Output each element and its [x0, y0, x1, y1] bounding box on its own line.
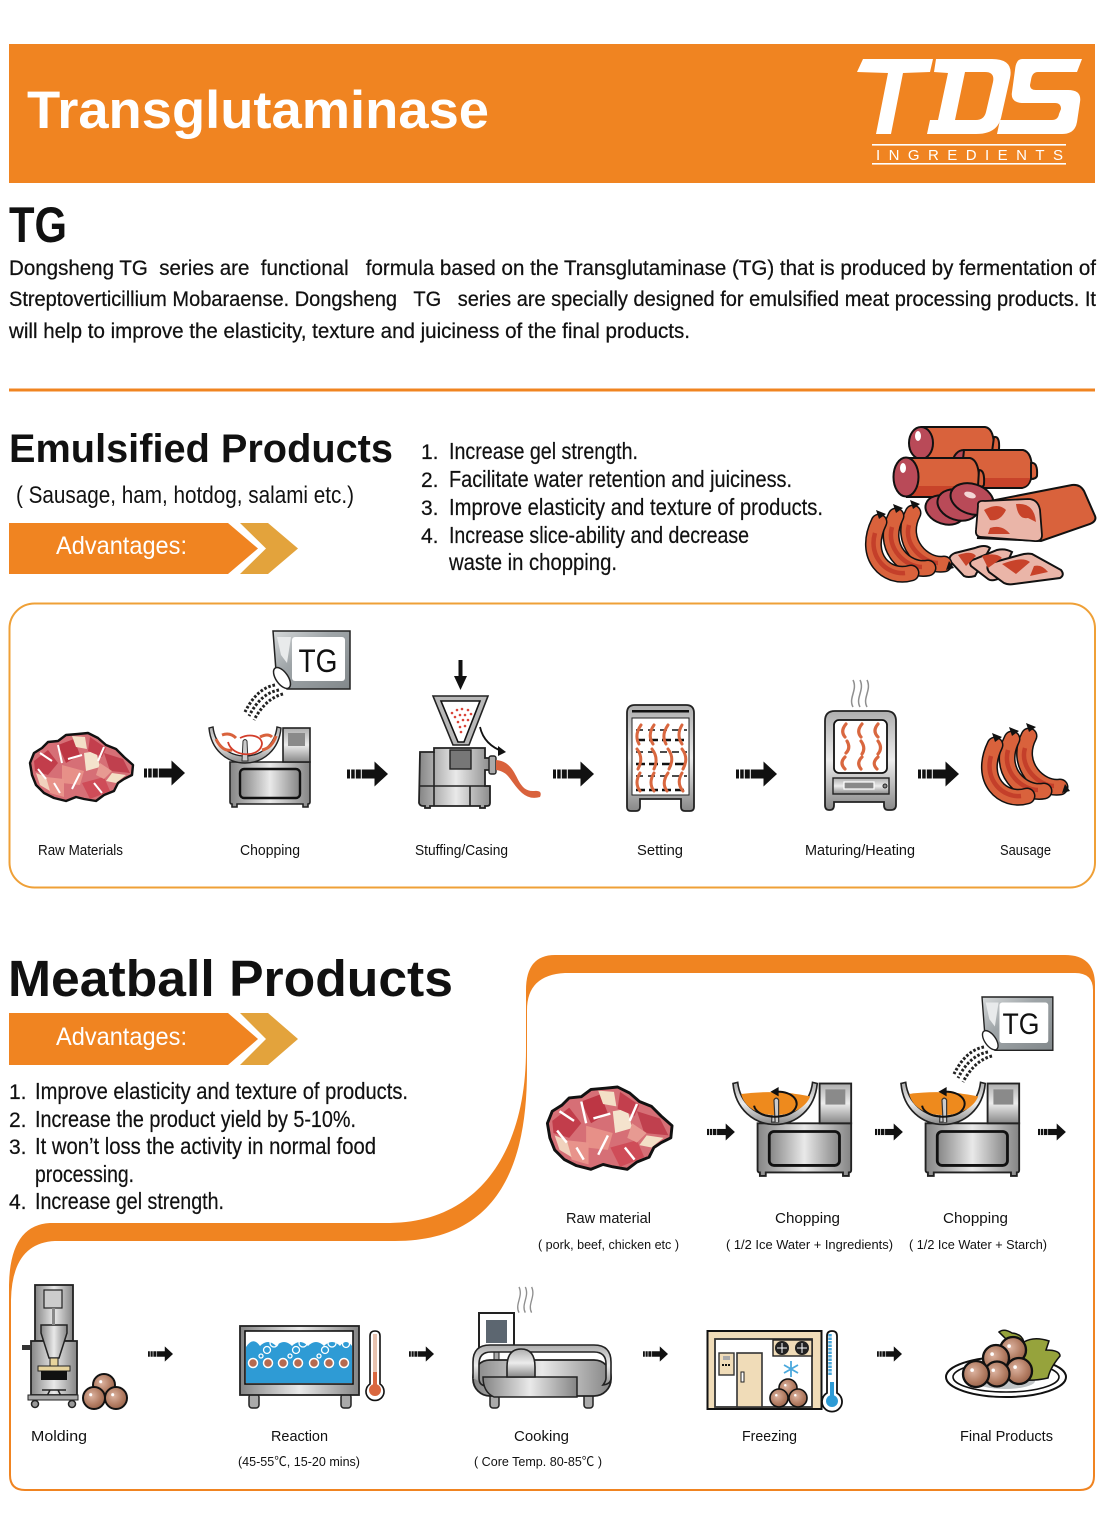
advantages list: emulsified: Increase gel strength.	[449, 438, 638, 464]
icon: chopper with TG: TG	[298, 643, 338, 679]
label: Freezing: Freezing	[742, 1428, 797, 1445]
icon: maturing oven	[825, 680, 896, 810]
arrow 3	[553, 762, 594, 786]
advantages list: meatball: Increase the product yield by 5-10%.	[35, 1106, 356, 1132]
advantages banner 2: Advantages:	[56, 1023, 187, 1051]
intro paragraph: will help to improve the elasticity, texture and juiciness of the final products.	[8, 320, 690, 343]
icon: raw material meat	[547, 1087, 672, 1169]
arrow 4	[736, 762, 777, 786]
arrow 2	[347, 762, 388, 786]
advantages list: meatball: It won’t loss the activity in normal food	[35, 1133, 376, 1159]
advantages banner 2	[9, 1013, 298, 1065]
heading: Meatball Products: Meatball Products	[8, 950, 453, 1007]
arrow 1	[144, 760, 185, 786]
advantages list: emulsified: waste in chopping.	[448, 549, 617, 575]
label: Chopping: Chopping	[240, 842, 300, 859]
advantages list: emulsified: 3.	[421, 497, 439, 520]
advantages list: meatball: processing.	[35, 1161, 134, 1187]
arrow	[643, 1346, 668, 1362]
advantages banner 1	[9, 523, 298, 574]
advantages list: emulsified: Increase slice-ability and decrease	[449, 522, 749, 548]
advantages list: emulsified: 2.	[421, 469, 439, 492]
intro paragraph: Dongsheng TG series are functional formula based on the Transglutaminase (TG) that is produced by fermentation of	[9, 257, 1096, 280]
advantages list: meatball: 3.	[9, 1136, 27, 1159]
icon: raw materials	[30, 733, 133, 801]
advantages list: meatball: Increase gel strength.	[35, 1188, 224, 1214]
arrow	[875, 1124, 903, 1140]
note: pork, beef, chicken: ( pork, beef, chicken etc )	[538, 1237, 679, 1252]
advantages list: meatball: Improve elasticity and texture of products.	[35, 1078, 408, 1104]
advantages list: emulsified: Improve elasticity and texture of products.	[449, 494, 823, 520]
arrow	[707, 1124, 735, 1140]
arrow	[148, 1346, 173, 1362]
icon: final meatball plate	[946, 1330, 1066, 1397]
label: Setting: Setting	[637, 842, 683, 859]
note: ice water and ingredients: ( 1/2 Ice Water + Ingredients)	[726, 1237, 893, 1252]
label: Maturing/Heating: Maturing/Heating	[805, 842, 915, 859]
label: Sausage: Sausage	[1000, 842, 1051, 859]
meatball panel frame	[9, 955, 1095, 1491]
subheading: product examples: ( Sausage, ham, hotdog, salami etc.)	[16, 482, 354, 509]
icon: chopper with water and starch plus TG	[901, 997, 1053, 1176]
icon: chopper with TG	[209, 631, 350, 807]
icon: setting rack	[627, 705, 694, 811]
title: Transglutaminase	[27, 81, 489, 140]
label: Stuffing/Casing: Stuffing/Casing	[415, 842, 508, 859]
header banner	[9, 44, 1095, 183]
label: Raw Materials: Raw Materials	[38, 842, 123, 859]
panel: sausage process	[10, 604, 1095, 888]
icon: stuffing machine	[419, 660, 541, 808]
icon: molding machine	[22, 1285, 127, 1409]
heading: Emulsified Products: Emulsified Products	[9, 427, 393, 471]
note: reaction conditions: (45-55℃, 15-20 mins)	[238, 1454, 360, 1469]
arrow	[409, 1346, 434, 1362]
icon: chopper with water and ingredients	[733, 1082, 851, 1176]
advantages banner 1: Advantages:	[56, 532, 187, 560]
icon: chopper with water and starch plus TG: TG	[1002, 1008, 1040, 1041]
label: Raw material: Raw material	[566, 1210, 651, 1227]
illustration: meat products	[873, 427, 1095, 584]
note: ice water and starch: ( 1/2 Ice Water + Starch)	[909, 1237, 1047, 1252]
advantages list: emulsified: 1.	[421, 441, 439, 464]
advantages list: emulsified: 4.	[421, 525, 439, 548]
icon: freezer	[708, 1331, 842, 1412]
arrow	[877, 1346, 902, 1362]
label: Reaction: Reaction	[271, 1428, 328, 1445]
advantages list: emulsified	[421, 438, 823, 575]
arrow	[1038, 1124, 1066, 1140]
arrow 5	[918, 762, 959, 786]
label: Final Products: Final Products	[960, 1428, 1053, 1445]
advantages list: meatball: 2.	[9, 1109, 27, 1132]
label: Cooking: Cooking	[514, 1428, 569, 1445]
advantages list: meatball: 1.	[9, 1081, 27, 1104]
heading: TG: TG	[9, 197, 67, 253]
advantages list: meatball: 4.	[9, 1191, 27, 1214]
advantages list: emulsified: Facilitate water retention and juiciness.	[449, 466, 792, 492]
intro paragraph	[8, 257, 1096, 343]
logo: TDS Ingredients	[857, 59, 1082, 165]
label: Chopping: Chopping	[775, 1210, 840, 1227]
icon: sausage	[989, 723, 1070, 797]
label: Chopping: Chopping	[943, 1210, 1008, 1227]
note: core temperature: ( Core Temp. 80-85℃ )	[474, 1454, 602, 1469]
advantages list: meatball	[9, 1078, 408, 1214]
label: Molding: Molding	[31, 1428, 87, 1445]
icon: cooking line	[473, 1287, 611, 1408]
logo: TDS Ingredients: INGREDIENTS	[876, 147, 1063, 164]
icon: reaction tank	[240, 1326, 384, 1408]
